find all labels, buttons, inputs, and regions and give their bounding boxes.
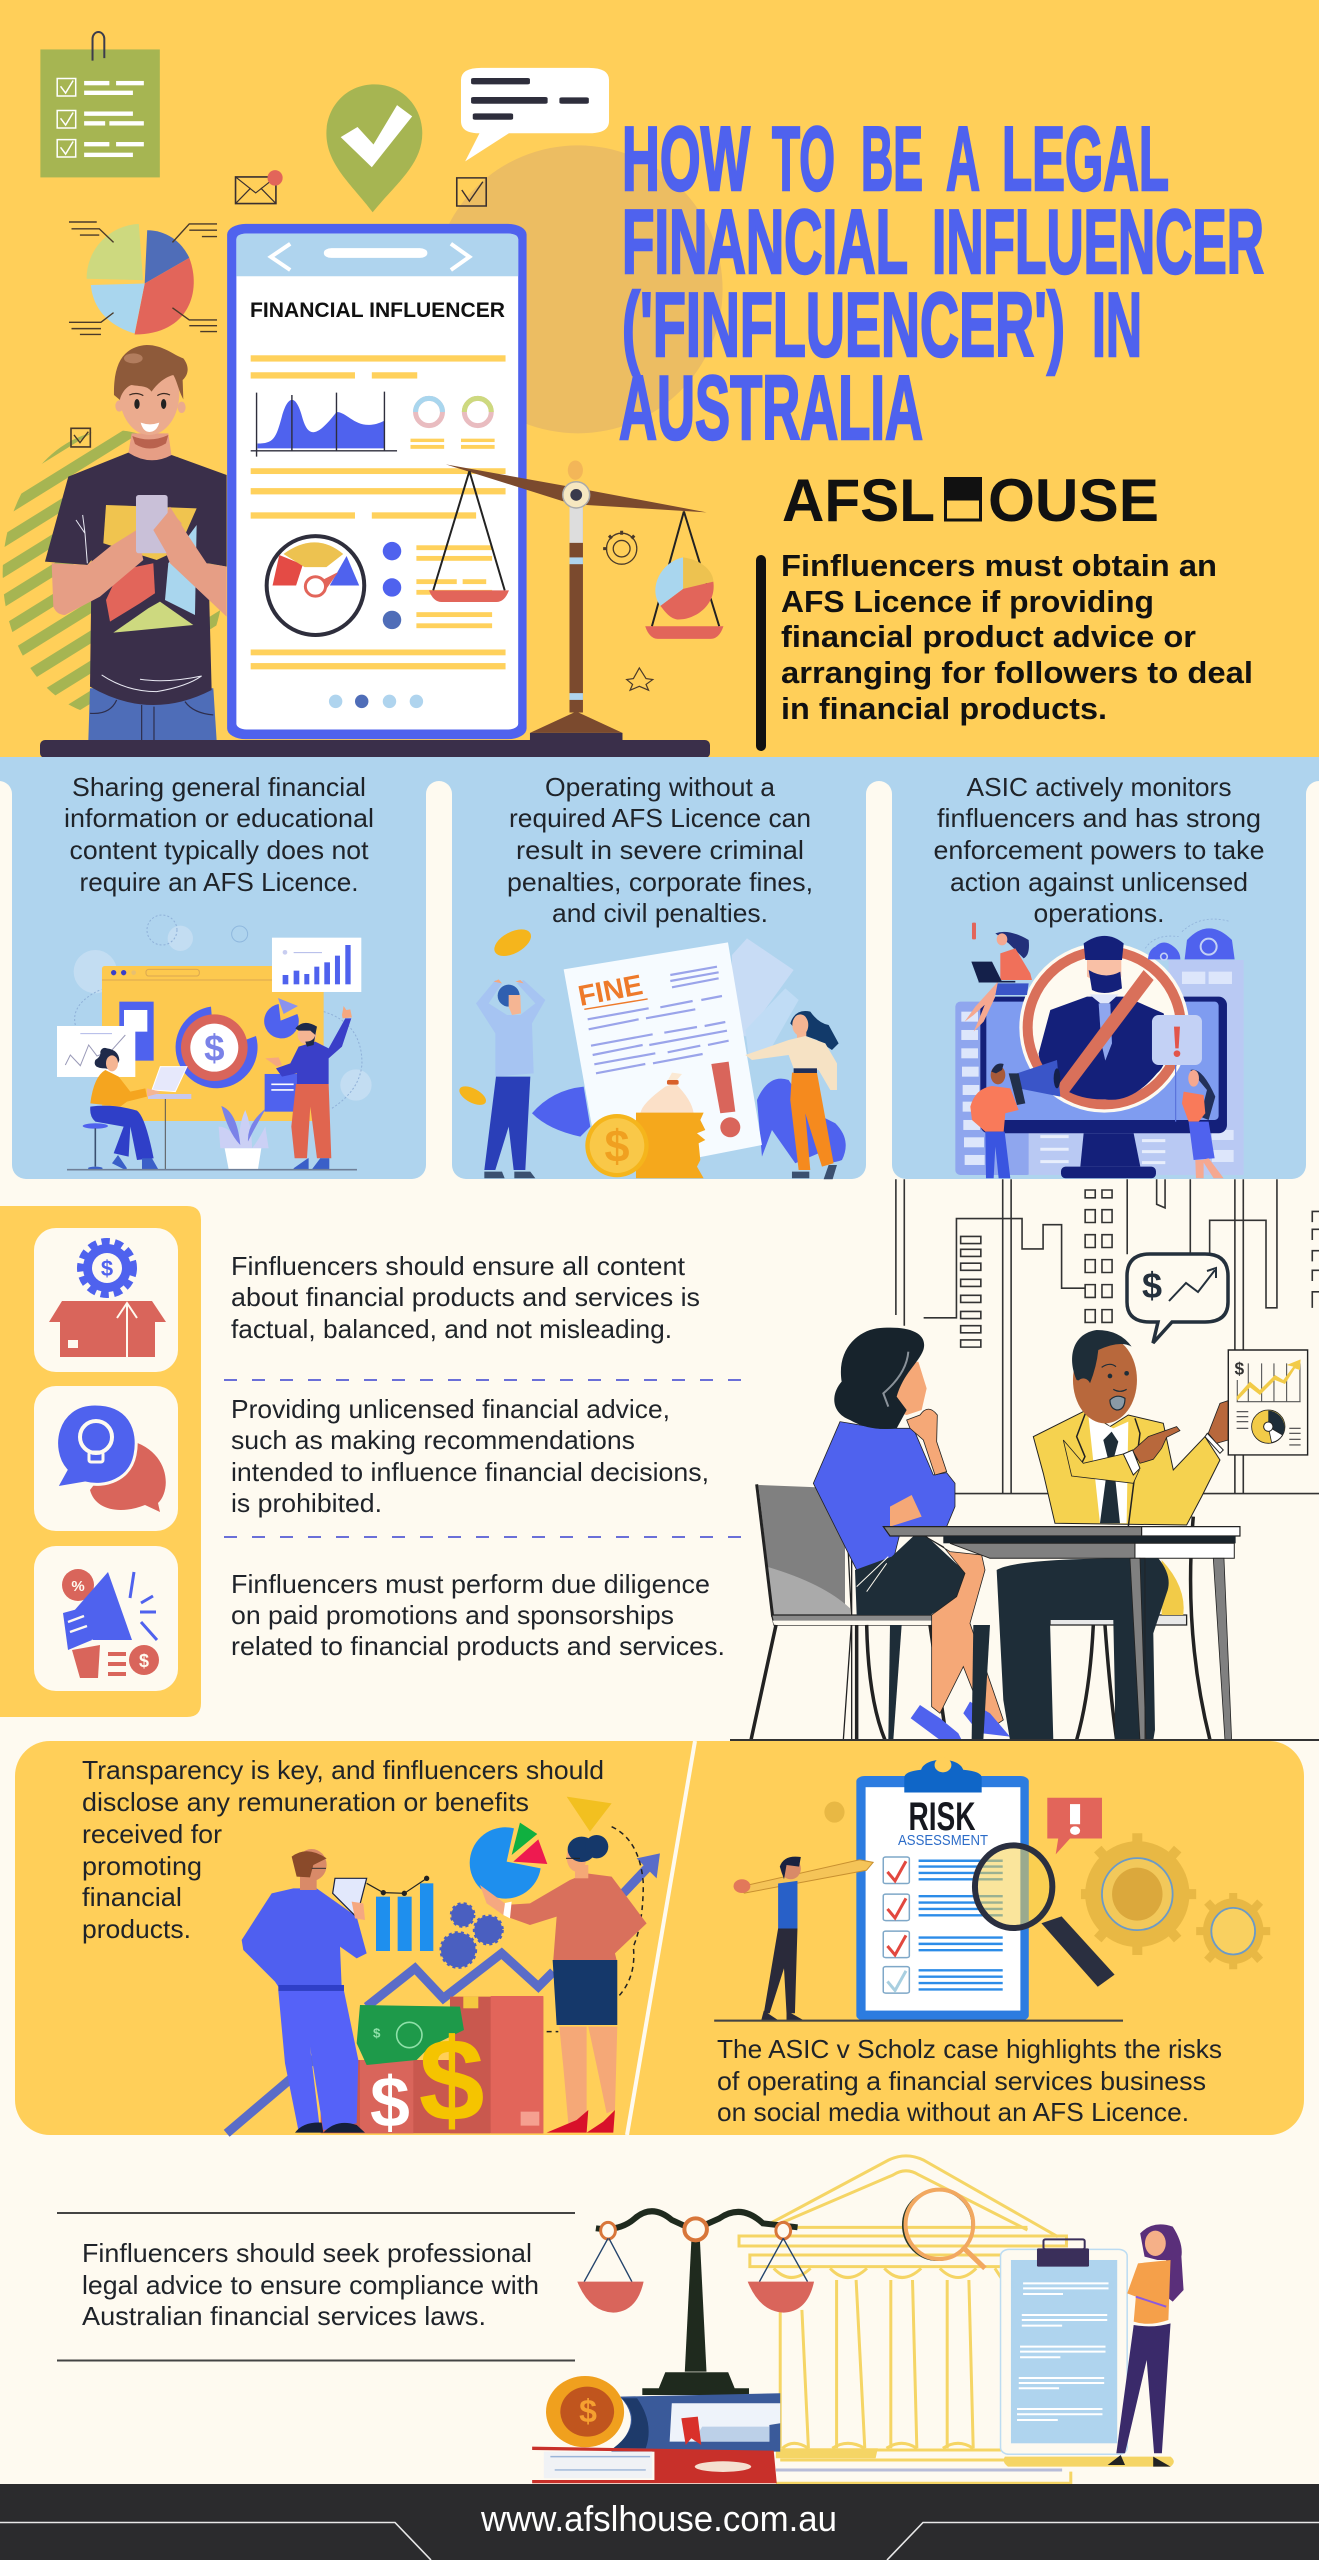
title: FINANCIAL [622, 192, 908, 293]
text: legal advice: Australian financial services laws. [82, 2301, 486, 2331]
title: A [946, 109, 980, 210]
illustration: clipboard and speech icons [40, 32, 723, 433]
title: LEGAL [1002, 109, 1169, 210]
text: general information: information or educational [64, 803, 374, 833]
lead statement: AFS Licence if providing [781, 584, 1154, 619]
icon: gear over open box [34, 1228, 178, 1372]
illustration: market analysts: $ [370, 2063, 410, 2143]
illustration: risk assessment clipboard [714, 1758, 1270, 2022]
text: transparency: received for [82, 1819, 222, 1849]
illustration: risk assessment clipboard: RISK [908, 1795, 976, 1839]
illustration: advisor meeting scene [751, 1328, 1308, 1740]
lead statement: financial product advice or [781, 619, 1196, 654]
title [619, 109, 1264, 459]
icon: promotion megaphone: % [71, 1578, 85, 1595]
text: general information: Sharing general financial [72, 772, 366, 802]
illustration: balance scale [429, 460, 723, 740]
title: TO [772, 109, 835, 210]
text: penalties [507, 772, 813, 928]
text: due diligence [231, 1569, 725, 1661]
panel: yellow icon tab [0, 1206, 201, 1717]
chair behind woman [758, 1485, 845, 1615]
text: penalties: Operating without a [545, 772, 776, 802]
text: factual content: factual, balanced, and not misleading. [231, 1314, 672, 1344]
text: unlicensed advice: such as making recommendations [231, 1425, 635, 1455]
table [883, 1527, 1142, 1536]
phone mockup [227, 224, 527, 739]
illustration: advisor speech bubble [1127, 1254, 1228, 1343]
pie chart icon [69, 222, 217, 334]
illustration: finance dashboard team [57, 915, 372, 1170]
illustration: fine notice: $ [604, 1121, 629, 1172]
text: transparency: financial [82, 1882, 182, 1912]
text: factual content: about financial products and services is [231, 1282, 700, 1312]
text: transparency: disclose any remuneration or benefits [82, 1787, 529, 1817]
phone mockup: FINANCIAL INFLUENCER [250, 299, 505, 322]
illustration: advisor speech bubble: $ [1142, 1265, 1162, 1306]
text: ASIC v Scholz: on social media without an AFS Licence. [717, 2097, 1189, 2127]
text: transparency: promoting [82, 1851, 202, 1881]
text: ASIC v Scholz: The ASIC v Scholz case highlights the risks [717, 2034, 1222, 2064]
text: ASIC monitoring: enforcement powers to take [934, 835, 1264, 865]
text: ASIC monitoring: ASIC actively monitors [966, 772, 1232, 802]
title: BE [861, 109, 923, 210]
man [1033, 1410, 1220, 1525]
text: penalties: required AFS Licence can [509, 803, 811, 833]
text: due diligence: related to financial products and services. [231, 1631, 725, 1661]
title: HOW [622, 109, 750, 210]
panel: blue band [0, 757, 1319, 1179]
lead statement: Finfluencers must obtain an [781, 548, 1217, 583]
man chair [1050, 1615, 1187, 1625]
text: transparency: products. [82, 1914, 191, 1944]
text: ASIC monitoring: action against unlicensed [950, 867, 1248, 897]
illustration: fine notice [456, 924, 846, 1179]
illustration: risk assessment clipboard: ASSESSMENT [898, 1832, 988, 1849]
text: ASIC monitoring: operations. [1034, 898, 1164, 928]
text: factual content [231, 1251, 700, 1344]
text: due diligence: Finfluencers must perform due diligence [231, 1569, 710, 1599]
footer bar [0, 2484, 1319, 2560]
text: unlicensed advice: intended to influence financial decisions, [231, 1457, 709, 1487]
woman [813, 1422, 955, 1570]
text: transparency [82, 1755, 604, 1944]
text: general information: content typically does not [70, 835, 369, 865]
text: due diligence: on paid promotions and sponsorships [231, 1600, 674, 1630]
panel: bottom yellow band [15, 1741, 1304, 2135]
illustration: ASIC enforcement on monitor [955, 919, 1244, 1178]
illustration: market analysts [227, 1797, 660, 2147]
text: transparency: Transparency is key, and finfluencers should [82, 1755, 604, 1785]
text: ASIC v Scholz [717, 2034, 1222, 2127]
text: general information [64, 772, 374, 897]
chart sheet [1228, 1350, 1308, 1455]
logo: AFSL House: AFSL [782, 467, 935, 534]
text: factual content: Finfluencers should ensure all content [231, 1251, 686, 1281]
text: penalties: and civil penalties. [552, 898, 768, 928]
lead statement: in financial products. [781, 691, 1107, 726]
illustration: market analysts: $ [373, 2025, 381, 2040]
icon: promotion megaphone: $ [139, 1651, 149, 1671]
man trousers [997, 1558, 1169, 1740]
title: AUSTRALIA [619, 358, 923, 459]
logo: AFSL House [782, 467, 1159, 534]
title: IN [1092, 275, 1142, 376]
text: general information: require an AFS Licence. [80, 867, 358, 897]
text: ASIC monitoring: finfluencers and has strong [937, 803, 1261, 833]
icon: lightbulb speech bubbles [34, 1386, 178, 1531]
panel: header background [0, 0, 1319, 758]
illustration: finance dashboard team: $ [204, 1028, 225, 1069]
illustration: advisor meeting scene: $ [1234, 1359, 1244, 1379]
illustration: city skyline line art [896, 1179, 1319, 1494]
lead statement: arranging for followers to deal [781, 655, 1253, 690]
illustration: fine notice: FINE [576, 969, 645, 1013]
text: ASIC monitoring [934, 772, 1264, 928]
text: penalties: penalties, corporate fines, [507, 867, 813, 897]
illustration: man holding a phone [2, 345, 227, 740]
footer bar: www.afslhouse.com.au [480, 2498, 837, 2539]
illustration: market analysts: $ [419, 2015, 485, 2147]
illustration: courthouse with scale, books and woman: $ [579, 2393, 597, 2429]
text: unlicensed advice: is prohibited. [231, 1488, 382, 1518]
text: unlicensed advice [231, 1394, 709, 1518]
logo: AFSL House: OUSE [988, 467, 1159, 534]
text: unlicensed advice: Providing unlicensed financial advice, [231, 1394, 670, 1424]
text: legal advice: legal advice to ensure compliance with [82, 2270, 539, 2300]
text: penalties: result in severe criminal [516, 835, 804, 865]
illustration: courthouse with scale, books and woman [532, 2156, 1184, 2483]
base bar [40, 740, 710, 758]
text: legal advice: Finfluencers should seek professional [82, 2238, 532, 2268]
lead statement [756, 548, 1253, 751]
text: legal advice [82, 2238, 539, 2331]
text: ASIC v Scholz: of operating a financial services business [717, 2066, 1206, 2096]
icon: promotion megaphone [34, 1546, 178, 1691]
icon: gear over open box: $ [101, 1256, 113, 1281]
